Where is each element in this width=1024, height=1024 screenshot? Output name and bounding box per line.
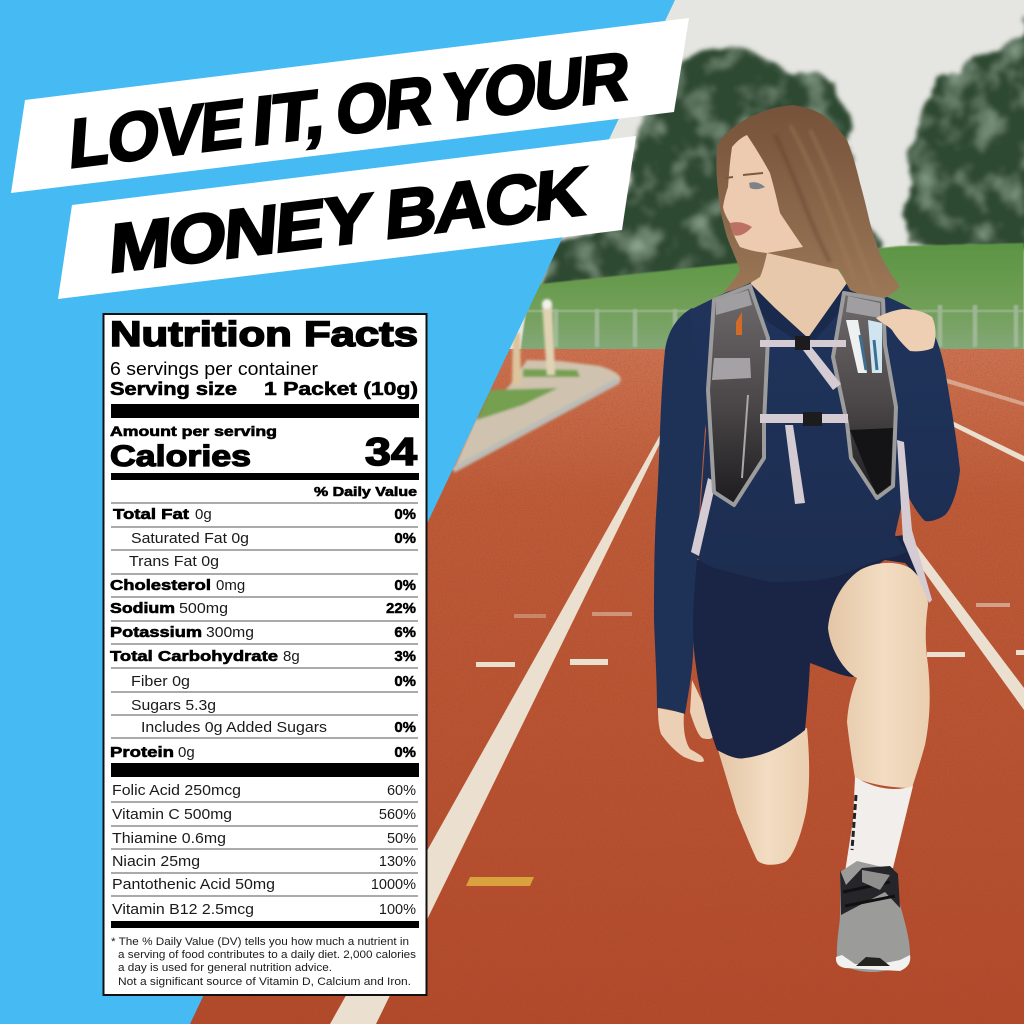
vitamin rows: Folic Acid 250mcg: [112, 782, 241, 799]
person kneeling on the track: [654, 105, 960, 972]
side straps: [691, 440, 932, 603]
vest left side: [708, 286, 768, 505]
trees: [535, 20, 1024, 295]
nutrient rows: 22%: [386, 600, 416, 617]
running vest: [691, 286, 932, 603]
shoe: [836, 861, 910, 972]
heading line one: YOUR: [439, 37, 632, 137]
nutrient rows: Sugars 5.3g: [131, 697, 216, 714]
hair: [716, 105, 900, 300]
nutrient rows: 3%: [394, 648, 416, 665]
nutrient rows: 0%: [394, 719, 416, 736]
back leg: [718, 728, 809, 865]
nutrient rows: Total Fat: [113, 506, 189, 523]
nutrient rows: Sodium: [110, 600, 175, 617]
vitamin rows: 50%: [387, 831, 416, 847]
vitamin rows: 560%: [379, 807, 416, 823]
straps: [760, 339, 848, 504]
nutrient rows: 0g: [195, 506, 212, 523]
nutrient rows: Includes 0g Added Sugars: [141, 719, 327, 736]
nutrient rows: 0%: [394, 673, 416, 690]
neck: [750, 250, 847, 338]
blue diagonal background: [0, 0, 675, 1024]
vitamin rows: 60%: [387, 783, 416, 799]
track surface: [150, 349, 1024, 1024]
vitamin rows: [111, 782, 418, 918]
supplement packets: [846, 320, 882, 373]
vitamin rows: Thiamine 0.6mg: [112, 830, 226, 847]
left thumb and hand: [658, 680, 713, 762]
servings: Serving size: [110, 379, 237, 399]
hair highlights: [775, 125, 875, 290]
servings: 6 servings per container: [110, 359, 318, 379]
nutrient rows: 8g: [283, 648, 300, 665]
facial features: [725, 173, 765, 236]
nutrient rows: Protein: [110, 744, 174, 761]
nutrition facts label: [104, 314, 426, 995]
nutrient rows: 6%: [394, 624, 416, 641]
heading line two: [107, 152, 589, 288]
nutrient rows: 0%: [394, 577, 416, 594]
label title: Nutrition Facts: [110, 315, 418, 354]
heading line one: [67, 37, 632, 183]
servings: 1 Packet (10g): [264, 379, 418, 399]
nutrient rows: 0%: [394, 506, 416, 523]
vitamin rows: Niacin 25mg: [112, 853, 200, 870]
right hand: [876, 309, 936, 351]
nutrient rows: 0g: [178, 744, 195, 761]
grass bank: [520, 243, 1024, 352]
banner: love it, or your: [11, 18, 689, 193]
face: [723, 135, 803, 253]
left arm sleeve: [654, 308, 712, 714]
calories: [110, 424, 417, 474]
nutrition facts label: % Daily Value: [314, 484, 417, 499]
nutrient rows: 0mg: [216, 577, 245, 594]
nutrient rows: 300mg: [206, 624, 254, 641]
vitamin rows: 1000%: [371, 877, 416, 893]
nutrient rows: Trans Fat 0g: [129, 553, 219, 570]
nutrient rows: Fiber 0g: [131, 673, 190, 690]
heading line one: LOVE: [67, 84, 245, 183]
footnote: a day is used for general nutrition advice.: [118, 962, 332, 974]
servings: [110, 359, 418, 399]
vitamin rows: Vitamin C 500mg: [112, 806, 232, 823]
nutrient rows: 0%: [394, 744, 416, 761]
footnote: Not a significant source of Vitamin D, Calcium and Iron.: [118, 976, 411, 988]
torso shirt: [690, 282, 960, 582]
fence: [525, 305, 1024, 347]
front leg: [828, 563, 930, 788]
heading line one: IT,: [251, 74, 326, 160]
nutrient rows: Total Carbohydrate: [110, 648, 278, 665]
calories: Calories: [110, 440, 251, 473]
nutrient rows: Saturated Fat 0g: [131, 530, 249, 547]
footnote: [111, 936, 417, 988]
vitamin rows: 130%: [379, 854, 416, 870]
nutrient rows: [110, 503, 418, 761]
heading line two: MONEY: [107, 178, 374, 288]
nutrient rows: Potassium: [110, 624, 202, 641]
vitamin rows: Vitamin B12 2.5mcg: [112, 901, 254, 918]
nutrient rows: 0%: [394, 530, 416, 547]
vitamin rows: Pantothenic Acid 50mg: [112, 876, 275, 893]
lane lines: [330, 378, 1024, 1024]
heading line one: OR: [334, 61, 435, 150]
footnote: a serving of food contributes to a daily diet. 2,000 calories: [118, 949, 417, 961]
vest right side: [833, 293, 896, 498]
curb and infield: [453, 299, 621, 470]
calories: 34: [365, 431, 417, 474]
nutrient rows: 500mg: [179, 600, 228, 617]
shorts: [693, 535, 927, 759]
calories: Amount per serving: [110, 424, 277, 439]
vitamin rows: 100%: [379, 902, 416, 918]
nutrient rows: Cholesterol: [110, 577, 211, 594]
heading line two: BACK: [383, 152, 589, 254]
footnote: * The % Daily Value (DV) tells you how much a nutrient in: [111, 936, 409, 948]
banner: money back: [58, 136, 636, 299]
sock: [845, 777, 913, 872]
